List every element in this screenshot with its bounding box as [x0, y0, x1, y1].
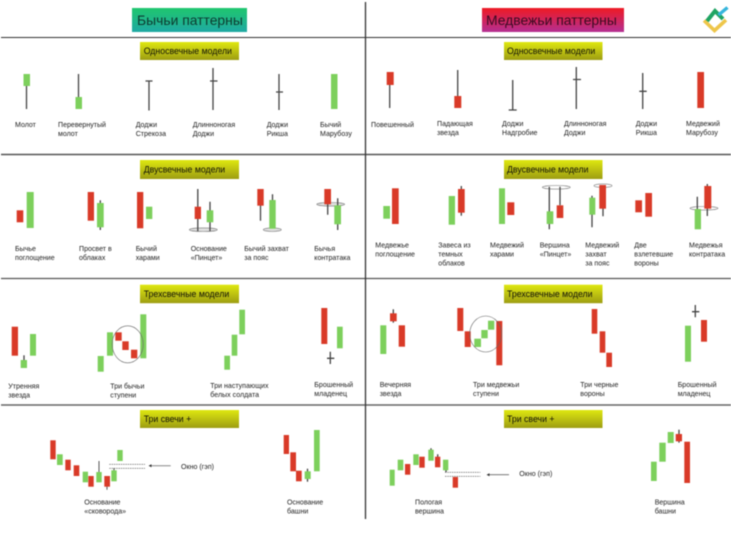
heading [504, 42, 602, 60]
candle: bearish marubozu: Медвежий [686, 120, 720, 128]
pattern: three falling methods [457, 308, 519, 398]
pattern: three rising methods: ступени [110, 392, 136, 399]
heading: Двусвечные модели [144, 164, 225, 174]
pattern: tweezer bottom: «Пинцет» [191, 255, 222, 262]
pattern: bullish belt hold: за пояс [244, 255, 269, 262]
pattern: piercing: облаках [79, 254, 106, 262]
pattern: bullish counterattack: Бычья [314, 246, 335, 253]
pattern: three white soldiers: Три наступающих [210, 383, 269, 390]
arrow: window gap [486, 473, 509, 476]
pattern: bullish engulfing [15, 192, 55, 262]
heading: Трехсвечные модели [507, 289, 593, 299]
candle: inverted hammer: Перевернутый [58, 121, 106, 129]
pattern: piercing: Просвет в [79, 246, 112, 253]
pattern: bearish counterattack: контратака [689, 251, 725, 258]
pattern: three rising methods [98, 314, 146, 399]
pattern: three white soldiers [210, 310, 269, 399]
pattern: tweezer bottom: Основание [191, 246, 227, 253]
title: bullish patterns: Бычьи паттерны [137, 12, 243, 28]
panel: bullish three candles plus [50, 410, 323, 515]
pattern: bearish engulfing: поглощение [375, 251, 415, 258]
candle: gravestone doji: Надгробие [502, 129, 538, 137]
gap marker [109, 464, 145, 468]
candle: long-legged doji [564, 67, 607, 137]
pattern: tower top: башни [655, 507, 676, 515]
pattern: gentle top: вершина [415, 508, 444, 515]
pattern: evening star: Вечерняя [380, 382, 411, 389]
candle: shooting star [437, 70, 473, 137]
pattern: tower bottom [284, 430, 323, 515]
pattern: bullish belt hold: Бычий захват [244, 245, 290, 253]
heading [504, 410, 602, 428]
pattern: evening star [380, 309, 411, 398]
pattern: bearish belt hold: захват [585, 251, 607, 258]
candle: dragonfly doji: Доджи [136, 122, 157, 129]
candle: rickshaw doji: Доджи [267, 122, 288, 129]
pattern: bearish harami: харами [490, 251, 514, 258]
pattern: frying pan bottom: «сковорода» [84, 508, 126, 515]
pattern: bullish belt hold [244, 189, 290, 262]
pattern: three black crows: вороны [580, 391, 605, 398]
heading [504, 160, 602, 179]
candle: hammer: Молот [15, 122, 37, 129]
pattern: tower bottom: Основание [287, 499, 323, 506]
pattern: morning star: звезда [8, 392, 30, 399]
candle: gravestone doji: Доджи [502, 121, 523, 128]
candle: hammer [15, 74, 37, 129]
pattern: abandoned baby bullish: младенец [314, 391, 347, 398]
pattern: bullish engulfing: Бычье [15, 246, 36, 253]
candle: bullish marubozu [320, 74, 352, 138]
panel: bearish single-candle models [371, 42, 720, 137]
heading: Три свечи + [144, 414, 191, 424]
pattern: bearish engulfing [375, 188, 415, 258]
pattern: three white soldiers: белых солдата [210, 391, 259, 399]
pattern: bullish engulfing: поглощение [15, 255, 55, 262]
panel: bearish two-candle models [375, 160, 725, 267]
title: bearish patterns [482, 8, 624, 32]
panel: bullish three-candle models [8, 285, 353, 399]
pattern: frying pan bottom [50, 440, 126, 515]
candle: long-legged doji [193, 68, 235, 138]
gap marker [445, 472, 480, 476]
candle: hanging man: Повешенный [371, 121, 414, 129]
icon: logo [704, 8, 728, 30]
heading [140, 410, 239, 428]
pattern: morning star: Утренняя [8, 383, 39, 390]
candle: rickshaw doji [636, 73, 657, 137]
pattern: morning star [8, 327, 39, 399]
candle: long-legged doji: Доджи [564, 130, 585, 137]
pattern: bullish counterattack [314, 189, 350, 262]
pattern: tower top: Вершина [655, 499, 685, 506]
pattern: piercing [79, 192, 112, 262]
pattern: tweezer bottom [189, 189, 227, 262]
pattern: bearish belt hold: за пояс [585, 260, 610, 267]
pattern: bullish counterattack: контратака [314, 255, 350, 262]
title: bullish patterns [132, 8, 247, 32]
candle: dragonfly doji: Стрекоза [136, 131, 166, 138]
label: window gap: Окно (гэп) [519, 471, 552, 478]
panel: bullish two-candle models [15, 160, 350, 262]
heading: Односвечные модели [144, 46, 232, 56]
heading [140, 42, 239, 60]
pattern: three black crows [580, 309, 618, 398]
pattern: tower bottom: башни [287, 507, 308, 515]
pattern: bearish counterattack [689, 184, 725, 258]
pattern: dark cloud cover [438, 186, 471, 267]
candle: bullish marubozu: Марубозу [320, 130, 352, 138]
pattern: evening star: звезда [380, 391, 402, 398]
candle: dragonfly doji [136, 81, 166, 138]
candle: rickshaw doji: Рикша [636, 130, 657, 137]
pattern: gentle top [390, 448, 458, 515]
heading: Односвечные модели [507, 46, 595, 56]
pattern: two crows: взлетевшие [634, 251, 673, 258]
pattern: bullish harami: Бычий [136, 245, 157, 253]
pattern: abandoned baby bullish: Брошенный [314, 381, 353, 389]
candle: gravestone doji [502, 80, 538, 137]
candle: long-legged doji: Доджи [193, 131, 214, 138]
label: window gap: Окно (гэп) [181, 464, 214, 471]
pattern: abandoned baby bullish [314, 308, 353, 398]
pattern: three rising methods: Три бычьи [110, 382, 144, 390]
pattern: frying pan bottom: Основание [84, 499, 121, 506]
candle: hanging man [371, 72, 414, 129]
heading [140, 160, 239, 179]
pattern: three black crows: Три черные [580, 382, 618, 389]
pattern: tweezer top [540, 186, 571, 258]
candle: long-legged doji: Длинноногая [564, 121, 607, 128]
pattern: abandoned baby bearish: Брошенный [678, 381, 717, 389]
candle: rickshaw doji [267, 74, 288, 138]
pattern: two crows: вороны [634, 260, 659, 267]
arrow: window gap [148, 464, 171, 467]
candle: shooting star: Падающая [437, 121, 473, 128]
pattern: bearish harami: Медвежий [490, 241, 524, 249]
pattern: dark cloud cover: темных [438, 251, 463, 258]
pattern: bullish harami: харами [136, 255, 160, 262]
pattern: three falling methods: ступени [473, 391, 499, 398]
pattern: tower top [651, 430, 690, 515]
heading: Двусвечные модели [507, 164, 589, 174]
pattern: bearish engulfing: Медвежье [375, 242, 409, 249]
pattern: dark cloud cover: Завеса из [438, 242, 471, 249]
candle: inverted hammer [58, 74, 106, 138]
pattern: bearish counterattack: Медвежья [689, 242, 723, 249]
candle: rickshaw doji: Доджи [636, 121, 657, 128]
pattern: bearish belt hold: Медвежий [585, 241, 619, 249]
candle: shooting star: звезда [437, 130, 459, 137]
candle: bearish marubozu [686, 72, 720, 137]
heading [504, 285, 602, 303]
pattern: bullish harami [136, 192, 160, 262]
pattern: abandoned baby bearish [678, 305, 717, 398]
pattern: tweezer top: «Пинцет» [540, 251, 571, 258]
pattern: dark cloud cover: облаков [438, 259, 465, 267]
pattern: two crows: Две [634, 242, 647, 249]
panel: bullish single-candle models [15, 42, 352, 138]
panel: bearish three-candle models [380, 285, 717, 398]
heading [140, 285, 239, 303]
pattern: tweezer top: Вершина [540, 242, 570, 249]
candle: inverted hammer: молот [58, 131, 79, 138]
candle: rickshaw doji: Рикша [267, 131, 288, 138]
pattern: abandoned baby bearish: младенец [678, 391, 710, 398]
title: bearish patterns: Медвежьи паттерны [486, 12, 617, 28]
pattern: three falling methods: Три медвежьи [473, 382, 519, 389]
candle: bullish marubozu: Бычий [320, 121, 341, 129]
pattern: bearish harami [490, 188, 524, 258]
panel: bearish three candles plus [390, 410, 690, 515]
heading: Три свечи + [507, 414, 555, 424]
candle: bearish marubozu: Марубозу [686, 129, 718, 137]
heading: Трехсвечные модели [144, 289, 229, 299]
pattern: bearish belt hold [585, 184, 619, 267]
pattern: gentle top: Пологая [415, 499, 442, 506]
candle: long-legged doji: Длинноногая [193, 122, 235, 129]
pattern: two crows [634, 193, 673, 267]
